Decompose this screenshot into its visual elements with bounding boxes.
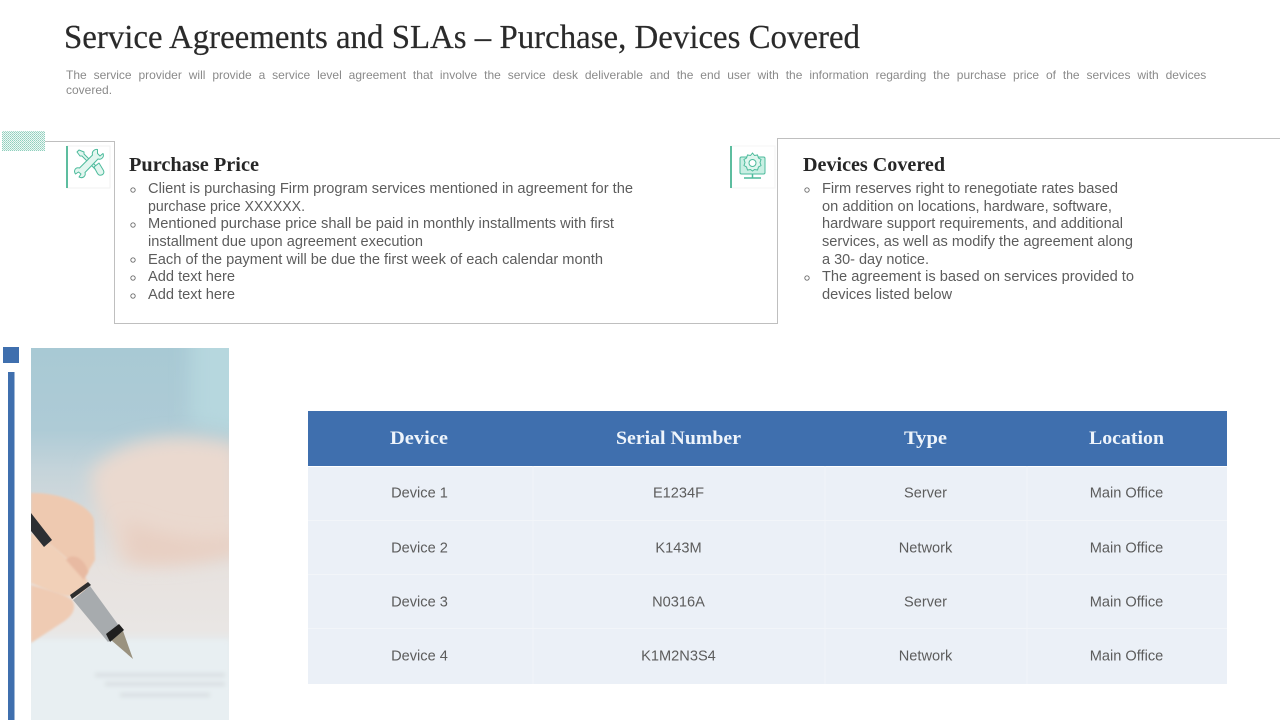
heading: devices covered: Devices Covered [803,154,945,176]
table row 3: Main Office [1090,594,1163,610]
table row 3: Server [904,594,947,610]
bullet list: purchase price: purchase price XXXXXX. [148,199,305,215]
table row 4: Main Office [1090,648,1163,664]
bullet list: purchase price: installment due upon agreement execution [148,234,423,250]
table header: Device [390,428,448,449]
bullet list: purchase price: Mentioned purchase price shall be paid in monthly installments with first [148,216,614,232]
description text [66,68,1206,97]
panel outline: purchase price [45,139,778,324]
bullet list: purchase price [131,181,633,303]
bullet list: devices covered [805,181,1134,303]
bullet list: devices covered: a 30- day notice. [822,252,929,268]
panel: devices covered [778,138,1280,303]
bullet list: devices covered: on addition on locations, hardware, software, [822,199,1112,215]
table row 2: Network [899,540,953,556]
table row 1: Main Office [1090,486,1163,502]
bullet list: purchase price: Add text here [148,287,235,303]
bullet list: purchase price: Client is purchasing Firm program services mentioned in agreement for the [148,181,633,197]
table header: Location [1089,428,1164,449]
bullet list: devices covered: devices listed below [822,287,952,303]
table row 2 [391,540,1163,556]
table row 2: Main Office [1090,540,1163,556]
panel outline: devices covered [778,138,1280,140]
timeline accent: blue square and bar [3,347,19,720]
table row 4: Device 4 [391,648,448,664]
table row 1 [391,486,1163,502]
table body background [308,466,1227,684]
heading: purchase price: Purchase Price [129,154,259,176]
description text: The service provider will provide a service level agreement that involve the service desk deliverable and the end user with the information regarding the purchase price of the services with devices [66,68,1206,82]
bullet list: devices covered: services, as well as modify the agreement along [822,234,1133,250]
bullet list: purchase price: Each of the payment will be due the first week of each calendar month [148,252,603,268]
icon: gear on monitor [730,146,775,188]
table row 1: Device 1 [391,486,448,502]
table row 1: Server [904,486,947,502]
panel: purchase price [45,139,778,324]
table row 3 [391,594,1163,610]
decorative dotted block [2,131,45,151]
table row 2: K143M [655,540,702,556]
description text: covered. [66,83,112,97]
bullet list: devices covered: The agreement is based on services provided to [822,269,1134,285]
icon: wrench and screwdriver [66,146,110,188]
bullet list: devices covered: hardware support requirements, and additional [822,216,1123,232]
photo: hand writing with pen [31,348,229,720]
table row 4: Network [899,648,953,664]
table row 4 [391,648,1163,664]
bullet list: purchase price: Add text here [148,269,235,285]
table row 4: K1M2N3S4 [641,648,716,664]
table row 3: Device 3 [391,594,448,610]
table header: Serial Number [616,428,742,449]
table: devices [308,411,1227,684]
bullet list: devices covered: Firm reserves right to renegotiate rates based [822,181,1118,197]
table header: Type [904,428,947,449]
table row 1: E1234F [653,486,704,502]
table header [308,411,1227,466]
table row 3: N0316A [652,594,705,610]
table row 2: Device 2 [391,540,448,556]
title: Service Agreements and SLAs – Purchase, Devices Covered [64,19,860,56]
